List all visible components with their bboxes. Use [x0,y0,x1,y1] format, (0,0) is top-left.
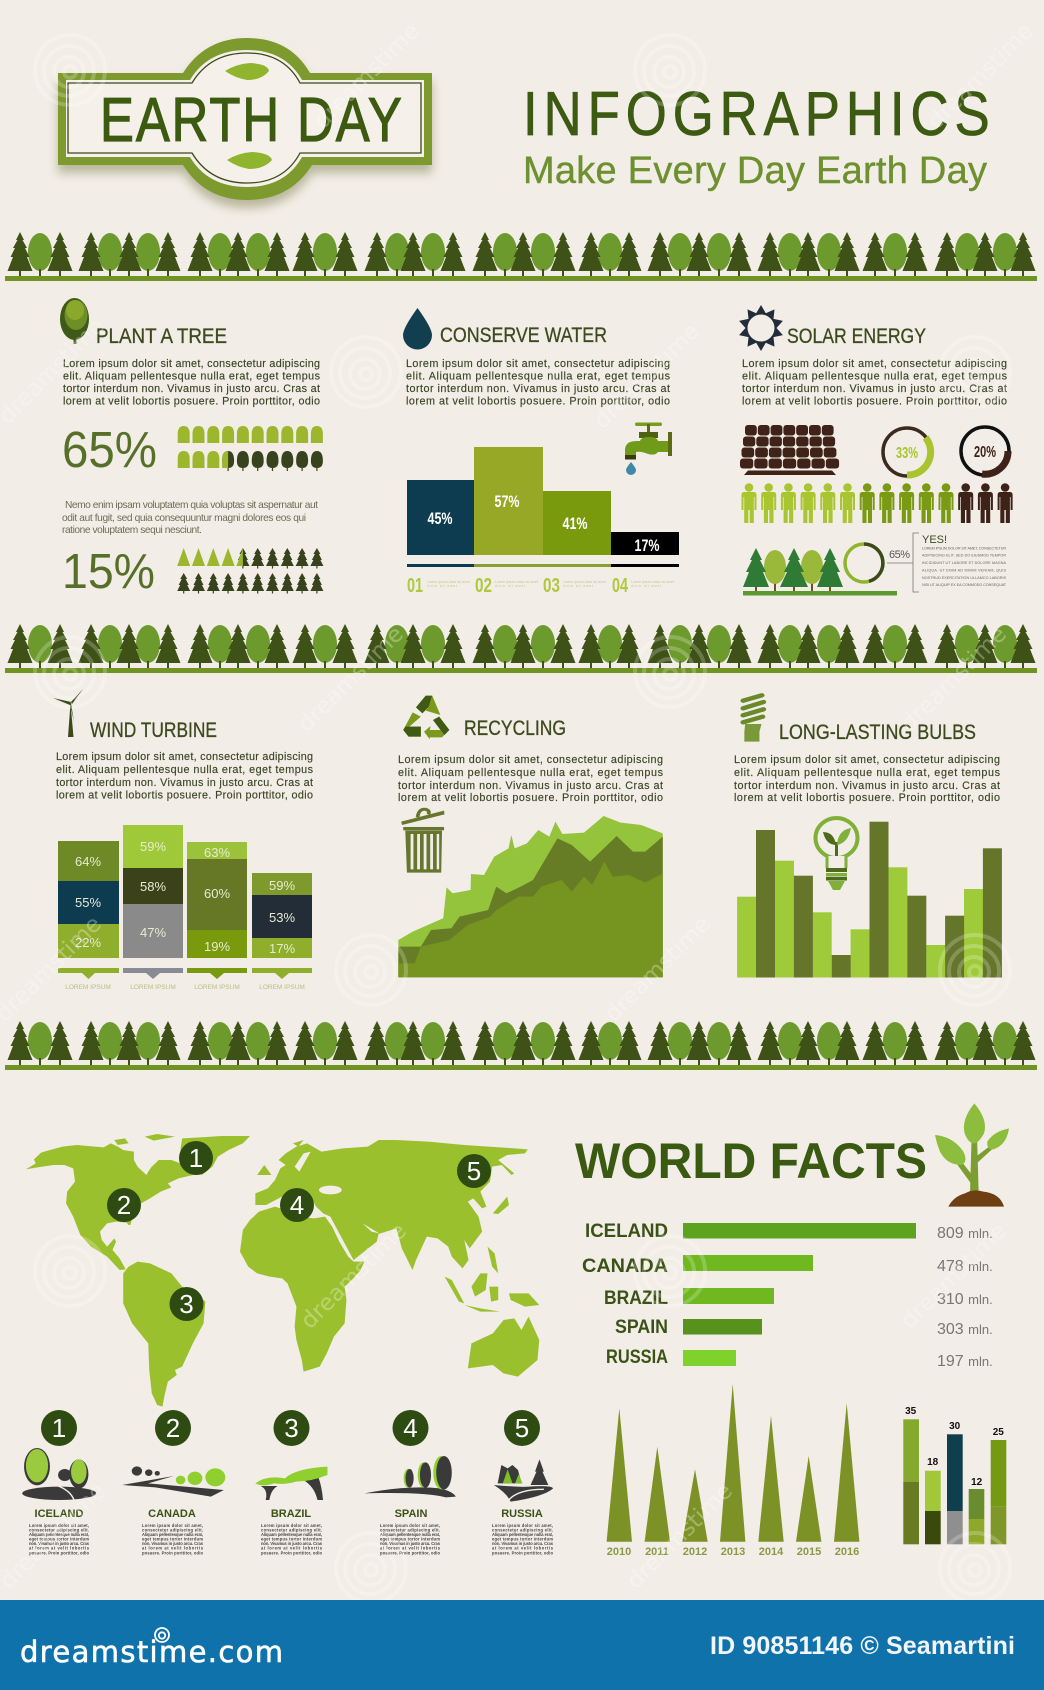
callout: yes note: LOREM IPSUM DOLOR SIT AMET, CONSECTETUR [922,546,1006,550]
bar chart: water: 03 [543,575,560,597]
donut: 20 percent [961,427,1009,475]
bar chart: water: 41% [562,514,588,533]
bar chart: water: dolor sit amet [563,584,593,588]
bar chart: world facts: RUSSIA [606,1347,668,1368]
text block: tortor interdum non. Vivamus in justo arcu. Cras at [742,383,1007,395]
logo: Earth Day badge [58,38,432,208]
text block: Lorem ipsum dolor sit amet, consectetur adipiscing [56,751,313,763]
text block: tortor interdum non. Vivamus in justo arcu. Cras at [398,780,663,792]
stacked column chart: 30 [949,1421,961,1432]
country column: iceland: posuere. Proin porttitor, odio [29,1550,89,1556]
bar chart: world facts: 303 mln. [937,1321,993,1338]
text block: lorem at velit lobortis posuere. Proin porttitor, odio [56,790,313,802]
text block: tortor interdum non. Vivamus in justo arcu. Cras at [63,383,320,395]
watermark overlay: dreamstime [600,911,716,1027]
triangle chart: years: 2010 [607,1546,631,1558]
country column: canada: posuere. Proin porttitor, odio [142,1550,203,1556]
bar chart: water [407,447,679,597]
region: north america [26,1143,193,1270]
stacked bar chart: 17% [269,941,295,956]
stacked bar chart: 59% [140,839,166,854]
text block: lorem at velit lobortis posuere. Proin porttitor, odio [398,792,663,804]
country column: russia: non. Vivamus in justo arcu. Cras [492,1541,554,1546]
country column: spain: Lorem ipsum dolor sit amet, [380,1523,440,1528]
logo: Earth Day badge: EARTH DAY [100,86,402,155]
icon: recycling arrows [403,696,449,739]
stacked bar chart: LOREM IPSUM [130,984,176,991]
country column: spain: SPAIN [395,1508,427,1520]
bar chart: bulbs [737,822,1002,978]
text block: Lorem ipsum dolor sit amet, consectetur adipiscing [398,754,663,766]
icon: sprout [935,1103,1009,1207]
icon: spiral [155,1628,169,1642]
triangle chart: years: 2012 [683,1546,707,1558]
callout: yes note: INCIDIDUNT UT LABORE ET DOLORE MAGNA [922,561,1007,565]
heading: wind turbine: WIND TURBINE [90,719,217,742]
donut: 20 percent: 20% [974,444,996,461]
country column: canada: CANADA [148,1508,196,1520]
panel: recycling [398,696,664,977]
stacked bar chart: 64% [75,854,101,869]
footer bar [0,1600,1044,1690]
map marker 5 [457,1154,491,1188]
bar chart: water: dolor sit amet [495,584,525,588]
text block: lorem at velit lobortis posuere. Proin porttitor, odio [406,396,670,408]
country column: canada: Aliquam pellentesque nulla erat, [142,1532,203,1537]
text block: tortor interdum non. Vivamus in justo arcu. Cras at [56,777,313,789]
country column: russia: Lorem ipsum dolor sit amet, [492,1523,553,1528]
stacked bar chart: 58% [140,879,166,894]
callout: yes note: ALIQUA. UT ENIM AD MINIM VENIAM, QUIS [922,568,1007,572]
trees on ground [743,548,897,596]
stacked bar chart: LOREM IPSUM [65,984,111,991]
country column: brazil: 3 [284,1413,299,1443]
country column: canada: eget tempus tortor interdum [142,1536,203,1542]
region: islands [114,1134,539,1377]
icon: solar panel [740,425,839,475]
region: africa [240,1207,364,1372]
bar chart: water: dolor sit amet [427,584,457,588]
country column: russia [492,1410,554,1556]
stacked column chart [903,1406,1006,1544]
country column: iceland [22,1410,96,1556]
stacked bar chart: 60% [204,886,230,901]
icon grid: 65 percent trees [178,426,323,471]
stacked bar chart: 19% [204,939,230,954]
country column: canada: 2 [166,1413,180,1443]
text block: elit. Aliquam pellentesque nulla erat, eget tempus [734,767,1001,779]
watermark overlay: dreamstime [589,318,705,434]
donut: 33 percent [883,428,931,476]
bar chart: world facts: 197 mln. [937,1353,993,1370]
map marker 4 [280,1188,314,1222]
country column: brazil: posuere. Proin porttitor, odio [261,1550,322,1556]
panel: long-lasting bulbs [734,695,1002,978]
country column: iceland: Lorem ipsum dolor sit amet, [29,1523,89,1528]
bar chart: water: 04 [612,575,629,597]
country column: brazil: at lorem at velit lobortis [261,1546,323,1550]
country column: spain: consectetur adipiscing elit. [380,1528,440,1532]
region: south america [123,1262,205,1407]
country column: brazil: BRAZIL [271,1508,311,1520]
text block: nemo: Nemo enim ipsam voluptatem quia voluptas sit aspernatur aut [65,500,318,511]
icon: water drop [403,308,432,350]
country column: iceland: Aliquam pellentesque nulla erat, [29,1532,89,1537]
bar chart: world facts: BRAZIL [604,1288,668,1309]
country column: canada: at lorem at velit lobortis [142,1546,204,1550]
icon: iceland landscape [22,1448,96,1500]
tree row divider 1 [5,232,1037,281]
stacked bar chart: LOREM IPSUM [259,984,305,991]
region: eurasia [255,1140,528,1270]
country column: brazil: consectetur adipiscing elit. [261,1528,322,1532]
stacked bar chart: 59% [269,878,295,893]
map marker 2 [107,1188,141,1222]
panel: plant a tree [60,298,323,599]
country column: russia: 5 [515,1413,529,1443]
icon: bulb with sprout [816,818,858,890]
heading: conserve water: CONSERVE WATER [440,324,607,347]
country column: brazil: Aliquam pellentesque nulla erat, [261,1532,322,1537]
country column: brazil [255,1410,327,1556]
watermark overlay: dreamstime [896,621,1012,737]
stat: 65 percent: 65% [62,421,157,478]
map marker 3 [170,1287,204,1321]
callout: yes note: NISI UT ALIQUIP EX EA COMMODO CONSEQUAT [922,583,1007,587]
bar chart: world facts: SPAIN [615,1317,668,1338]
bar chart: water: dolor sit amet [631,584,661,588]
map marker 2: 2 [117,1190,131,1220]
country column: brazil: Lorem ipsum dolor sit amet, [261,1523,322,1528]
country column: spain [364,1410,456,1556]
triangle chart: years [607,1384,859,1558]
icon: brazil landscape [255,1467,327,1500]
icon: tree [60,298,89,344]
heading: world facts: WORLD FACTS [575,1133,927,1189]
bar chart: water: Lorem ipsum dolor sit amet [631,580,674,584]
stacked column chart: 35 [905,1406,917,1417]
country column: brazil: non. Vivamus in justo arcu. Cras [261,1541,323,1546]
heading: solar energy: SOLAR ENERGY [787,325,926,348]
bar chart: world facts: CANADA [582,1256,668,1277]
bar chart: water: 01 [407,575,423,597]
stacked bar chart: 47% [140,925,166,940]
bar chart: world facts: ICELAND [585,1221,668,1242]
text block: elit. Aliquam pellentesque nulla erat, eget tempus [742,370,1008,382]
stacked bar chart: 63% [204,845,230,860]
country column: iceland: 1 [52,1413,66,1443]
text block: Lorem ipsum dolor sit amet, consectetur adipiscing [742,358,1007,370]
country column: spain: eget tempus tortor interdum [380,1536,440,1542]
country column: spain: 4 [403,1413,418,1443]
watermark overlay: dreamstime [296,1218,412,1334]
donut: 65 percent [845,544,883,582]
country column: canada: non. Vivamus in justo arcu. Cras [142,1541,204,1546]
stacked column chart: 25 [993,1427,1004,1438]
stacked column chart: 18 [927,1457,939,1468]
callout: yes note: NOSTRUD EXERCITATION ULLAMCO LABORIS [922,576,1007,580]
country column: iceland: eget tempus tortor interdum [29,1536,89,1542]
country column: iceland: at lorem at velit lobortis [29,1546,90,1550]
map marker 4: 4 [290,1190,304,1220]
text block: tortor interdum non. Vivamus in justo arcu. Cras at [734,780,1000,792]
bar chart: world facts: 478 mln. [937,1258,993,1275]
tree row divider 2 [5,624,1037,673]
country column: iceland: ICELAND [35,1508,83,1520]
bar chart: water: Lorem ipsum dolor sit amet [495,580,538,584]
text block [63,358,321,408]
text block: elit. Aliquam pellentesque nulla erat, eget tempus [398,767,664,779]
text block: elit. Aliquam pellentesque nulla erat, eget tempus [63,370,321,382]
footer logo text: dreamstime.com [20,1635,283,1669]
heading: recycling: RECYCLING [464,717,566,740]
bar chart: water: 02 [475,575,492,597]
triangle chart: years: 2013 [721,1546,745,1558]
stacked bar chart: 53% [269,910,295,925]
icon: sun [739,305,783,351]
watermark overlay: dreamstime [622,1478,738,1594]
country column: iceland: consectetur adipiscing elit. [29,1528,89,1532]
stacked bar chart: LOREM IPSUM [194,984,240,991]
tree row divider 3 [5,1021,1037,1070]
country column: russia: eget tempus tortor interdum [492,1536,553,1542]
text block [742,358,1008,408]
country column: canada: Lorem ipsum dolor sit amet, [142,1523,203,1528]
text block: nemo: odit aut fugit, sed quia consequuntur magni dolores eos qui [62,513,306,524]
country column: brazil: eget tempus tortor interdum [261,1536,322,1542]
triangle chart: years: 2011 [645,1546,669,1558]
title: Infographics: INFOGRAPHICS [523,80,990,149]
country column: canada: consectetur adipiscing elit. [142,1528,203,1532]
callout: yes note [887,533,1007,592]
subtitle: Make Every Day Earth Day [523,150,987,192]
watermark overlay: dreamstime [293,621,409,737]
bar chart: water: 17% [634,536,660,555]
text block: Lorem ipsum dolor sit amet, consectetur adipiscing [63,358,320,370]
icon: canada landscape [122,1466,225,1497]
callout: yes note: YES! [922,534,947,546]
text block: Lorem ipsum dolor sit amet, consectetur adipiscing [406,358,670,370]
icon: wind turbine [53,689,83,737]
bar chart: water: 57% [494,492,520,511]
stacked column chart: 12 [971,1477,983,1488]
icon: spiral bulb [743,695,764,742]
panel: wind turbine [53,689,314,991]
watermark overlay: dreamstime [896,1218,1012,1334]
panel: solar energy [739,305,1013,596]
text block: lorem at velit lobortis posuere. Proin porttitor, odio [734,792,1000,804]
map marker 3: 3 [179,1289,194,1319]
country column: russia: at lorem at velit lobortis [492,1546,554,1550]
map marker 5: 5 [467,1156,481,1186]
text block: elit. Aliquam pellentesque nulla erat, eget tempus [406,370,671,382]
text block: nemo: ratione voluptatem sequi nesciunt. [62,525,202,536]
text block: nemo [62,500,318,536]
map marker 1 [179,1141,213,1175]
text block [406,358,671,408]
triangle chart: years: 2014 [759,1546,784,1558]
triangle chart: years: 2016 [835,1546,859,1558]
label: 65 percent: 65% [889,549,910,561]
country column: canada [122,1410,225,1556]
pictogram: people [742,483,1013,523]
triangle chart: years: 2015 [797,1546,821,1558]
icon: russia landscape [494,1459,553,1502]
text block: lorem at velit lobortis posuere. Proin porttitor, odio [63,396,320,408]
heading: long-lasting bulbs: LONG-LASTING BULBS [779,721,976,744]
icon: faucet [625,422,672,475]
icon: spain landscape [364,1456,456,1497]
bar chart: water: Lorem ipsum dolor sit amet [427,580,470,584]
world map [26,1134,539,1407]
country column: spain: posuere. Proin porttitor, odio [380,1550,440,1556]
text block: tortor interdum non. Vivamus in justo arcu. Cras at [406,383,670,395]
region: greenland [180,1136,250,1175]
bar chart: water: 45% [428,509,452,528]
country column: russia: consectetur adipiscing elit. [492,1528,553,1532]
region: inland seas [136,1152,379,1233]
donut: 33 percent: 33% [896,445,918,462]
watermark overlay: dreamstime [309,18,425,134]
heading: plant a tree: PLANT A TREE [96,325,227,348]
text block: lorem at velit lobortis posuere. Proin porttitor, odio [742,396,1007,408]
country column: iceland: non. Vivamus in justo arcu. Cras [29,1541,90,1546]
country column: spain: Aliquam pellentesque nulla erat, [380,1532,440,1537]
stacked bar chart [58,825,312,991]
stat: 15 percent: 15% [62,545,155,599]
country column: russia: Aliquam pellentesque nulla erat, [492,1532,553,1537]
watermark overlay: dreamstime [923,18,1039,134]
bar chart: world facts: 809 mln. [937,1225,993,1242]
country column: spain: at lorem at velit lobortis [380,1546,441,1550]
map marker 1: 1 [189,1143,203,1173]
icon grid: 15 percent trees [177,548,323,594]
text block: Lorem ipsum dolor sit amet, consectetur adipiscing [734,754,1000,766]
icon: trash can [401,809,444,873]
country column: russia: RUSSIA [501,1508,543,1520]
country column: spain: non. Vivamus in justo arcu. Cras [380,1541,441,1546]
text block [734,754,1001,804]
panel: conserve water [403,308,679,597]
bar chart: water: Lorem ipsum dolor sit amet [563,580,606,584]
text block [56,751,314,802]
bar chart: world facts [582,1221,993,1370]
text block [398,754,664,804]
area chart [398,816,663,977]
country column: russia: posuere. Proin porttitor, odio [492,1550,553,1556]
text block: elit. Aliquam pellentesque nulla erat, eget tempus [56,764,314,776]
stacked bar chart: 55% [75,895,101,910]
bar chart: world facts: 310 mln. [937,1291,993,1308]
footer id text: ID 90851146 © Seamartini [710,1632,1015,1660]
stacked bar chart: 22% [75,935,101,950]
callout: yes note: ADIPISICING ELIT, SED DO EIUSMOD TEMPOR [922,554,1006,558]
